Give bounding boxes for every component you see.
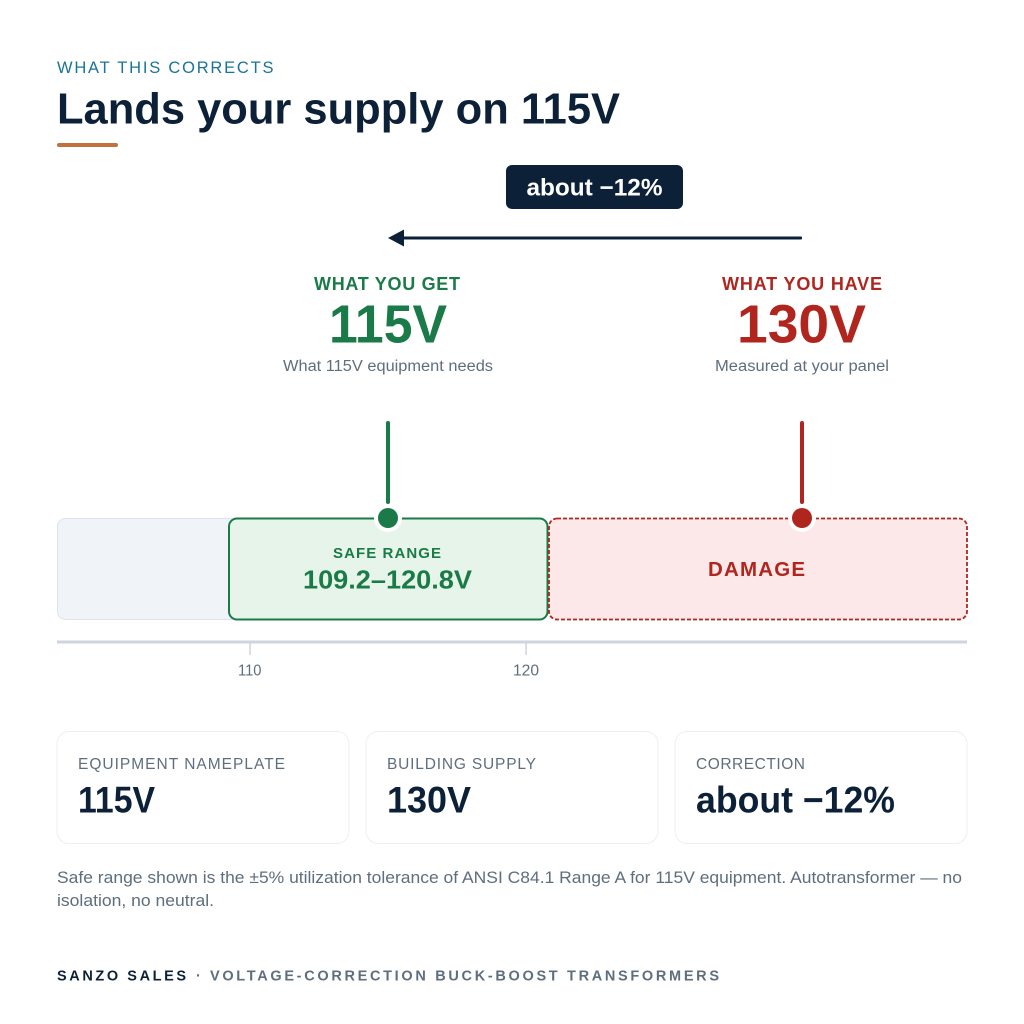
card: correction: about −12%	[696, 780, 895, 821]
voltage axis	[57, 640, 967, 680]
card: equipment nameplate	[57, 732, 349, 844]
card: building supply: 130V	[387, 780, 471, 821]
current readout: what you have	[715, 274, 889, 375]
voltage axis: 110	[238, 662, 262, 680]
safe range zone: 109.2–120.8V	[303, 566, 472, 594]
eyebrow: WHAT THIS CORRECTS	[57, 59, 274, 77]
safe range zone: SAFE RANGE	[333, 545, 441, 562]
damage zone: DAMAGE	[708, 558, 805, 581]
card: building supply	[366, 732, 658, 844]
marker: 115V	[374, 421, 402, 532]
target readout: what you get: What 115V equipment needs	[283, 358, 493, 375]
footer brand line: VOLTAGE-CORRECTION BUCK-BOOST TRANSFORMERS	[210, 968, 719, 984]
target readout: what you get: 115V	[329, 295, 447, 355]
marker: 130V	[788, 421, 816, 532]
footnote: Safe range shown is the ±5% utilization tolerance of ANSI C84.1 Range A for 115V equipment. Autotransformer — no	[57, 869, 962, 887]
correction badge	[506, 165, 683, 209]
footer brand line: SANZO SALES	[57, 968, 186, 984]
target readout: what you get: WHAT YOU GET	[314, 274, 460, 294]
current readout: what you have: 130V	[737, 295, 866, 355]
footer brand line: ·	[196, 968, 201, 984]
footnote	[57, 869, 962, 910]
safe range zone	[229, 518, 548, 620]
footnote: isolation, no neutral.	[57, 892, 214, 910]
target readout: what you get	[283, 274, 493, 375]
title: Lands your supply on 115V	[57, 84, 621, 134]
title accent rule	[57, 143, 118, 147]
card: equipment nameplate: EQUIPMENT NAMEPLATE	[78, 756, 285, 773]
arrow from 130V to 115V	[388, 230, 802, 246]
card: correction: CORRECTION	[696, 756, 805, 773]
card: correction	[675, 732, 967, 844]
current readout: what you have: Measured at your panel	[715, 358, 889, 375]
low zone	[58, 518, 238, 620]
damage zone	[549, 518, 967, 620]
card: equipment nameplate: 115V	[78, 780, 155, 821]
correction badge: about −12%	[526, 174, 662, 202]
current readout: what you have: WHAT YOU HAVE	[722, 274, 882, 294]
voltage axis: 120	[513, 662, 539, 680]
card: building supply: BUILDING SUPPLY	[387, 756, 536, 773]
voltage scale bar	[58, 518, 967, 620]
